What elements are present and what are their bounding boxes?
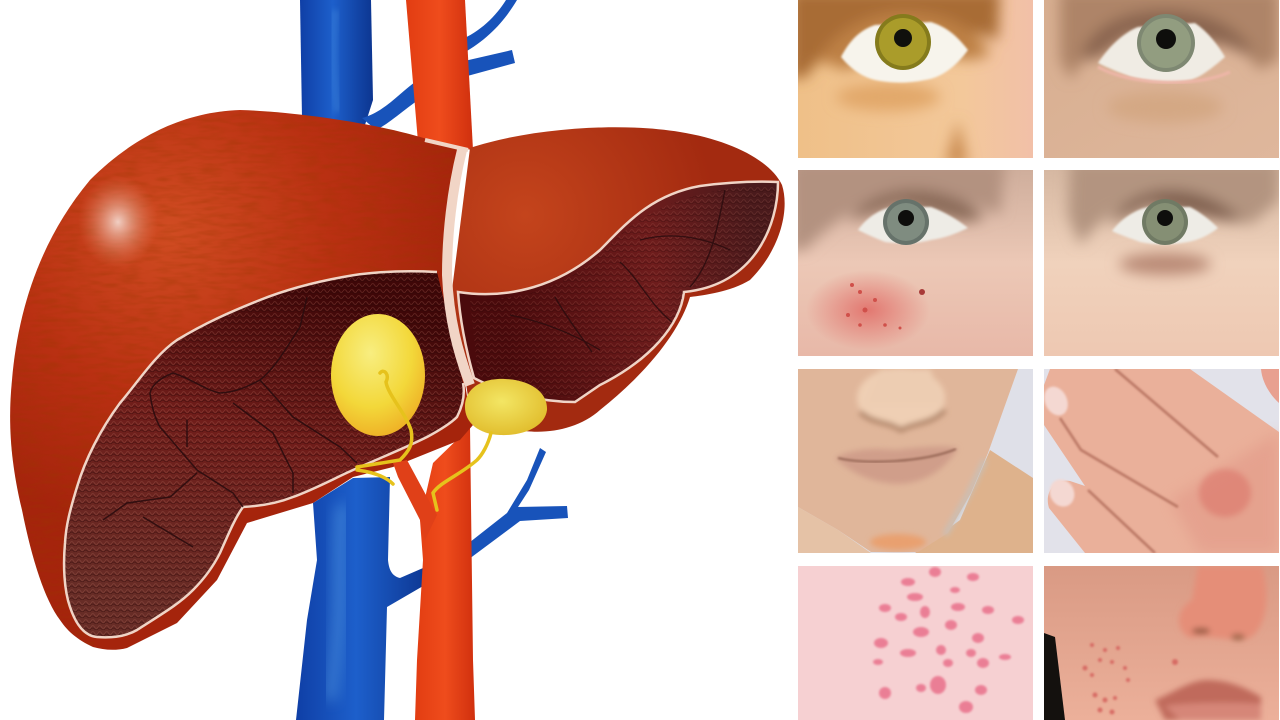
panel: photo of lower face [798,368,1033,553]
icon: pancreas nodule [465,379,547,435]
right cut surface texture [470,186,775,398]
panel: photo of rash on skin [798,566,1033,720]
icon: gallbladder [331,314,425,436]
panel: photo of hand with rash [1040,369,1279,553]
highlight on left lobe [78,176,158,268]
ligament top edge [425,140,468,150]
bile ducts [357,371,491,510]
right lobe [452,127,785,432]
left cut surface [65,272,463,636]
vein network on left cut surface [103,297,357,547]
hepatic artery [393,460,437,540]
panel: eye photo, yellow iris [790,0,1033,165]
liver centre ligament [447,150,470,385]
panel: photo of cheek with rash [1044,566,1279,720]
left lobe and rim [10,110,473,650]
icon: vena cava, upper blue vessel with branches [300,0,517,130]
panel: eye photo, grey iris [1044,0,1279,158]
panel: eye photo, under-eye [1044,160,1279,356]
left lobe fibre texture [10,110,462,647]
icon: vena cava, lower blue vessel with branches [296,448,568,720]
panel: eye photo, cheek redness [790,160,1033,356]
left cut surface outline [64,271,464,637]
icon: aorta, upper red vessel [406,0,473,150]
right cut surface [458,182,778,402]
panel: liver [10,110,785,650]
icon: aorta, lower red vessel [415,427,475,720]
vein network on right cut surface [510,190,730,352]
